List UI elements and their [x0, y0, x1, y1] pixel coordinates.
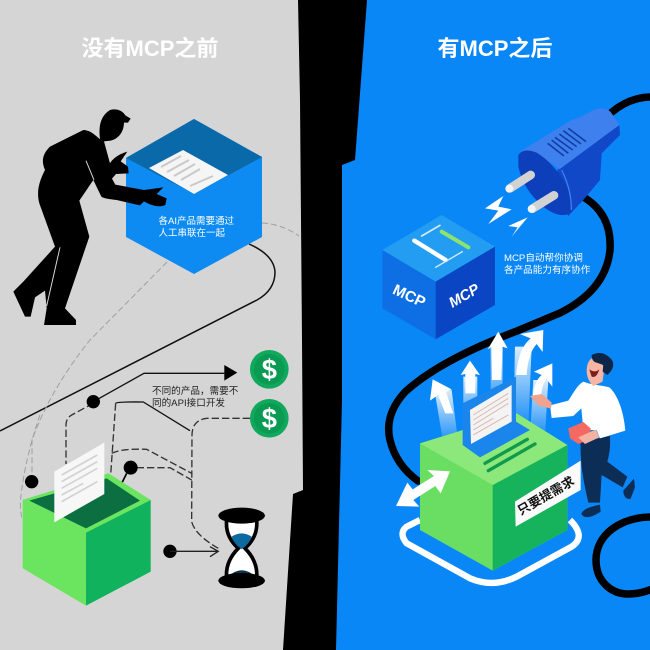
label card: 只要提需求	[515, 473, 577, 518]
icon: hourglass	[218, 508, 265, 588]
caption: API note: 不同的产品，需要不	[152, 385, 239, 397]
caption: blue box: 各AI产品需要通过	[158, 215, 234, 227]
connector: black curved line on the left panel	[0, 244, 275, 431]
arrow to hourglass	[170, 547, 218, 557]
panel: after MCP background	[336, 0, 650, 650]
caption: MCP coordination: MCP自动帮你协调	[504, 252, 583, 264]
dashed connectors	[66, 403, 250, 548]
connector: gray dashed lines on the left panel	[20, 223, 299, 522]
solid line	[116, 402, 190, 431]
white platform outline	[402, 520, 579, 583]
label card	[515, 461, 581, 527]
chart: left panel connector network	[23, 350, 289, 606]
icon: blue open box	[126, 119, 262, 274]
node stem	[122, 473, 127, 483]
person	[530, 353, 635, 517]
icon: lower dollar coin	[250, 399, 289, 438]
plug vents	[548, 128, 586, 156]
caption: blue box: 人工串联在一起	[158, 227, 226, 239]
double arrow	[396, 470, 450, 507]
cable: black power cord	[389, 97, 650, 594]
nodes	[25, 395, 177, 558]
title: after MCP: 有MCP之后	[438, 36, 552, 61]
glow columns	[435, 347, 548, 443]
icon: blue plug	[505, 108, 620, 216]
icon: upper dollar coin	[250, 350, 289, 389]
cube label left: MCP	[390, 282, 428, 311]
icon: upper dollar coin: $	[262, 354, 277, 385]
cube top symbol	[414, 225, 468, 267]
cube label right: MCP	[446, 281, 483, 311]
solid arrow to upper coin	[93, 365, 237, 402]
icon: green open box with paper	[23, 443, 151, 606]
plug pins	[505, 175, 554, 213]
document in blue box	[149, 150, 228, 194]
figure: black silhouette person	[13, 109, 167, 325]
panel: before MCP background	[0, 0, 303, 650]
scene: green box with laptop and person	[396, 330, 635, 583]
title: before MCP: 没有MCP之前	[82, 36, 218, 61]
green box	[420, 413, 567, 571]
box top lines	[485, 439, 535, 471]
icon: lower dollar coin: $	[262, 403, 277, 434]
laptop	[463, 377, 530, 457]
caption: MCP coordination: 各产品能力有序协作	[504, 264, 591, 276]
paper	[54, 443, 104, 522]
upward arrows	[430, 330, 552, 413]
icon: MCP cube	[382, 215, 495, 339]
caption: API note: 同的API接口开发	[152, 397, 225, 409]
icon: sparks	[485, 196, 528, 237]
